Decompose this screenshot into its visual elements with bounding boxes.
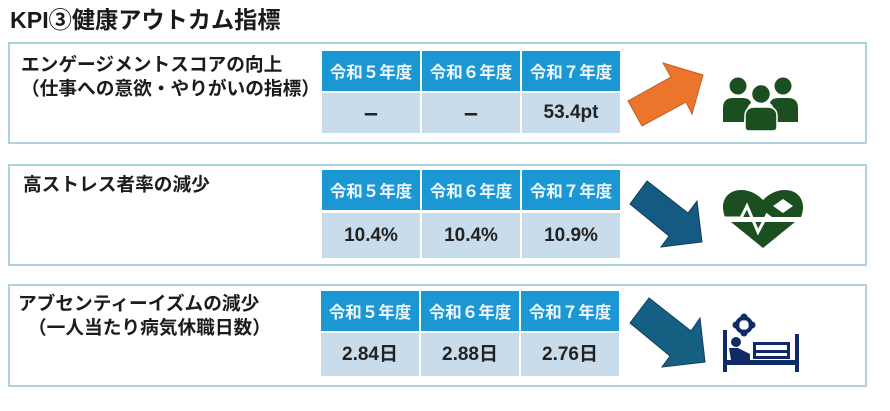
icon: hospital bed (723, 314, 799, 372)
table: high stress rate: 令和６年度 (430, 183, 512, 201)
table: high stress rate: 10.4% (344, 224, 398, 246)
table: absenteeism: 2.88日 (442, 344, 498, 365)
heading: absenteeism (18, 293, 271, 338)
table: high stress rate: 10.9% (544, 224, 598, 246)
table: engagement score: 令和５年度 (330, 64, 412, 82)
table: high stress rate: 10.4% (444, 224, 498, 246)
panel: engagement score (8, 42, 867, 144)
table: high stress rate (322, 170, 620, 258)
table: absenteeism (321, 291, 619, 376)
heading: absenteeism: アブセンティーイズムの減少 (18, 293, 259, 314)
icon: group of people (723, 78, 798, 131)
table: engagement score: 令和７年度 (530, 64, 612, 82)
panel: absenteeism (8, 284, 867, 387)
table: engagement score: 令和６年度 (430, 64, 512, 82)
table: absenteeism: 令和５年度 (329, 304, 411, 322)
heading: absenteeism: （一人当たり病気休職日数） (28, 317, 271, 338)
arrow: up (orange) (628, 63, 703, 126)
heading: engagement score: エンゲージメントスコアの向上 (21, 54, 282, 75)
arrow: down (absenteeism) (630, 298, 705, 367)
table: engagement score: – (464, 98, 478, 126)
arrow: down (stress) (630, 181, 702, 247)
table: engagement score: 53.4pt (544, 102, 598, 123)
title: KPI③健康アウトカム指標 (10, 7, 281, 33)
table: high stress rate: 令和５年度 (330, 183, 412, 201)
heading: engagement score: （仕事への意欲・やりがいの指標） (21, 78, 320, 99)
table: absenteeism: 令和６年度 (429, 304, 511, 322)
table: absenteeism: 2.76日 (542, 344, 598, 365)
table: absenteeism: 令和７年度 (529, 304, 611, 322)
heading: engagement score (21, 54, 320, 99)
panel: high stress rate (8, 164, 867, 266)
table: absenteeism: 2.84日 (342, 344, 398, 365)
heading: high stress rate: 高ストレス者率の減少 (23, 174, 210, 195)
table: engagement score (322, 51, 620, 133)
table: high stress rate: 令和７年度 (530, 183, 612, 201)
table: engagement score: – (364, 98, 378, 126)
icon: heart with pulse (722, 190, 803, 248)
